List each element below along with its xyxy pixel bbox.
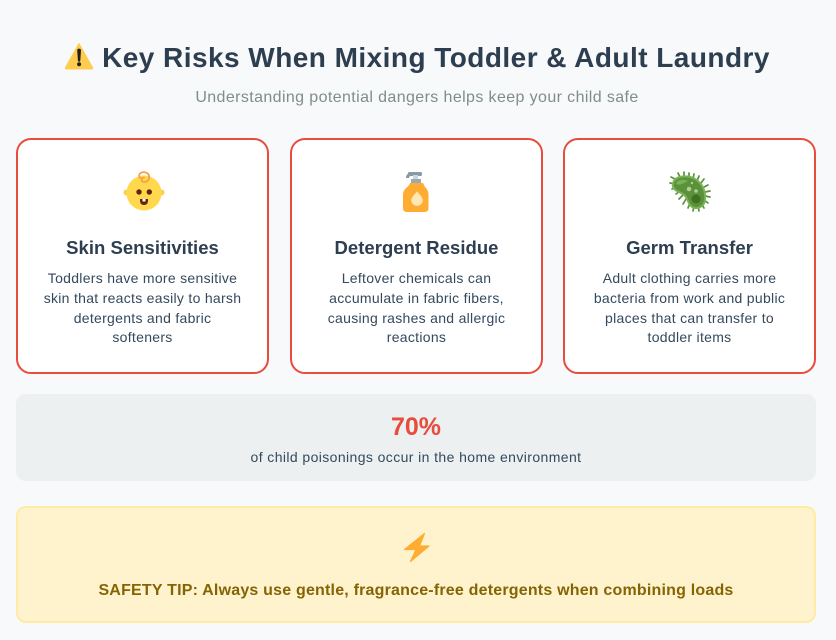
body text: skin that reacts easily to harsh [44,290,241,306]
panel: detergent residue [290,138,543,374]
body text: Adult clothing carries more [603,270,776,286]
title [65,42,770,73]
heading: Skin Sensitivities [66,237,219,258]
body text: bacteria from work and public [594,290,785,306]
panel: statistic [16,394,816,481]
body text: causing rashes and allergic [328,310,505,326]
body text: places that can transfer to [605,310,774,326]
stat number: 70% [391,413,441,441]
body text [594,270,785,345]
panel: safety tip [16,506,816,623]
panel: skin sensitivities [16,138,269,374]
panel: germ transfer [563,138,816,374]
title text: Key Risks When Mixing Toddler & Adult Laundry [102,42,770,73]
body text: Toddlers have more sensitive [48,270,237,286]
body text: Leftover chemicals can [342,270,491,286]
tip text: SAFETY TIP: Always use gentle, fragrance-free detergents when combining loads [98,582,734,599]
icon: lightning bolt [404,532,430,562]
subtitle: Understanding potential dangers helps keep your child safe [195,89,639,106]
body text: reactions [387,329,446,345]
body text: toddler items [648,329,731,345]
body text: detergents and fabric [74,310,211,326]
body text: softeners [112,329,173,345]
icon: warning [65,43,94,70]
body text [328,270,505,345]
icon: baby face [124,171,164,210]
heading: Detergent Residue [335,237,498,258]
stat caption: of child poisonings occur in the home environment [251,449,581,465]
heading: Germ Transfer [626,237,753,258]
body text [44,270,241,345]
body text: accumulate in fabric fibers, [329,290,504,306]
icon: lotion bottle [403,172,428,212]
icon: microbe [669,171,711,212]
